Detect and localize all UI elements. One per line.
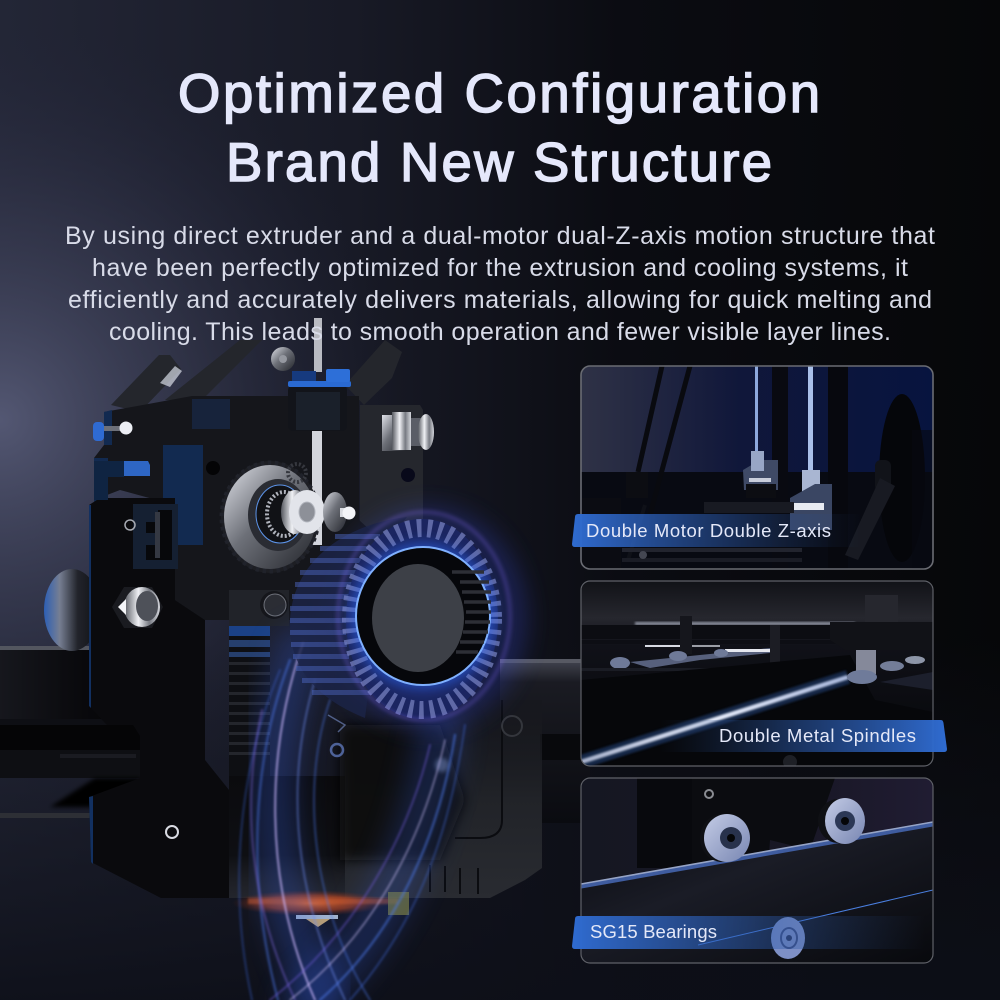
left wheel [44,569,100,651]
airflow haze [274,650,440,1000]
blower hub [372,564,464,672]
heat sink fins [229,626,270,776]
panel 3 photo [581,778,933,963]
extruder assembly [44,318,542,1000]
blower shell tongue [290,517,407,718]
horizontal rail [0,646,590,823]
nozzle [296,915,338,927]
duct details [328,715,449,772]
mid screw [112,587,163,628]
panel 2 photo [581,581,933,769]
title: Optimized Configuration [178,63,820,124]
small screw [260,591,288,619]
upper body [94,396,370,620]
duct dark area [340,725,465,860]
filament tube top [314,318,322,372]
blower opening [350,543,496,689]
title [178,63,820,193]
description text: efficiently and accurately delivers materials, allowing for quick melting and [68,286,932,314]
right nut [382,412,434,451]
top screw [271,347,295,371]
panel 3 label: SG15 Bearings [590,921,717,942]
panel: sg15 bearings [572,778,933,963]
holes [206,461,415,482]
panel 2 label: Double Metal Spindles [719,725,916,746]
description text: cooling. This leads to smooth operation and fewer visible layer lines. [109,318,891,346]
panel 1 label [572,514,862,547]
blue tab [124,461,150,476]
blue coupler [288,369,351,431]
description text: have been perfectly optimized for the extrusion and cooling systems, it [92,254,908,282]
title: Brand New Structure [226,132,772,193]
duct outline [430,700,522,894]
bracket [229,590,289,640]
filament tube [312,431,322,545]
panel 3 border [581,778,933,963]
blower ring [338,512,510,720]
gear [221,461,319,573]
fan duct [345,700,542,898]
lower centre housing [229,776,345,898]
right plate [360,405,423,530]
upper arms [111,340,402,412]
panel 1 label: Double Motor Double Z-axis [586,520,831,541]
panel 2 border [581,581,933,766]
panel: double metal spindles [581,581,947,769]
panel 2 label [660,720,947,752]
airflow streaks [239,643,465,1000]
panel 1 photo [581,366,933,569]
panel: double motor double z-axis [572,366,933,569]
hub [281,490,356,534]
blue side edges [94,399,230,545]
description text: By using direct extruder and a dual-motor dual-Z-axis motion structure that [65,222,935,250]
blower glow [344,522,512,714]
description text [65,222,935,346]
main black plate [89,498,229,898]
lower hole [166,826,178,838]
panel 1 border [581,366,933,569]
connector [125,504,178,569]
left pin [93,422,132,441]
panel 3 label [572,916,925,949]
heater glow [232,890,409,916]
